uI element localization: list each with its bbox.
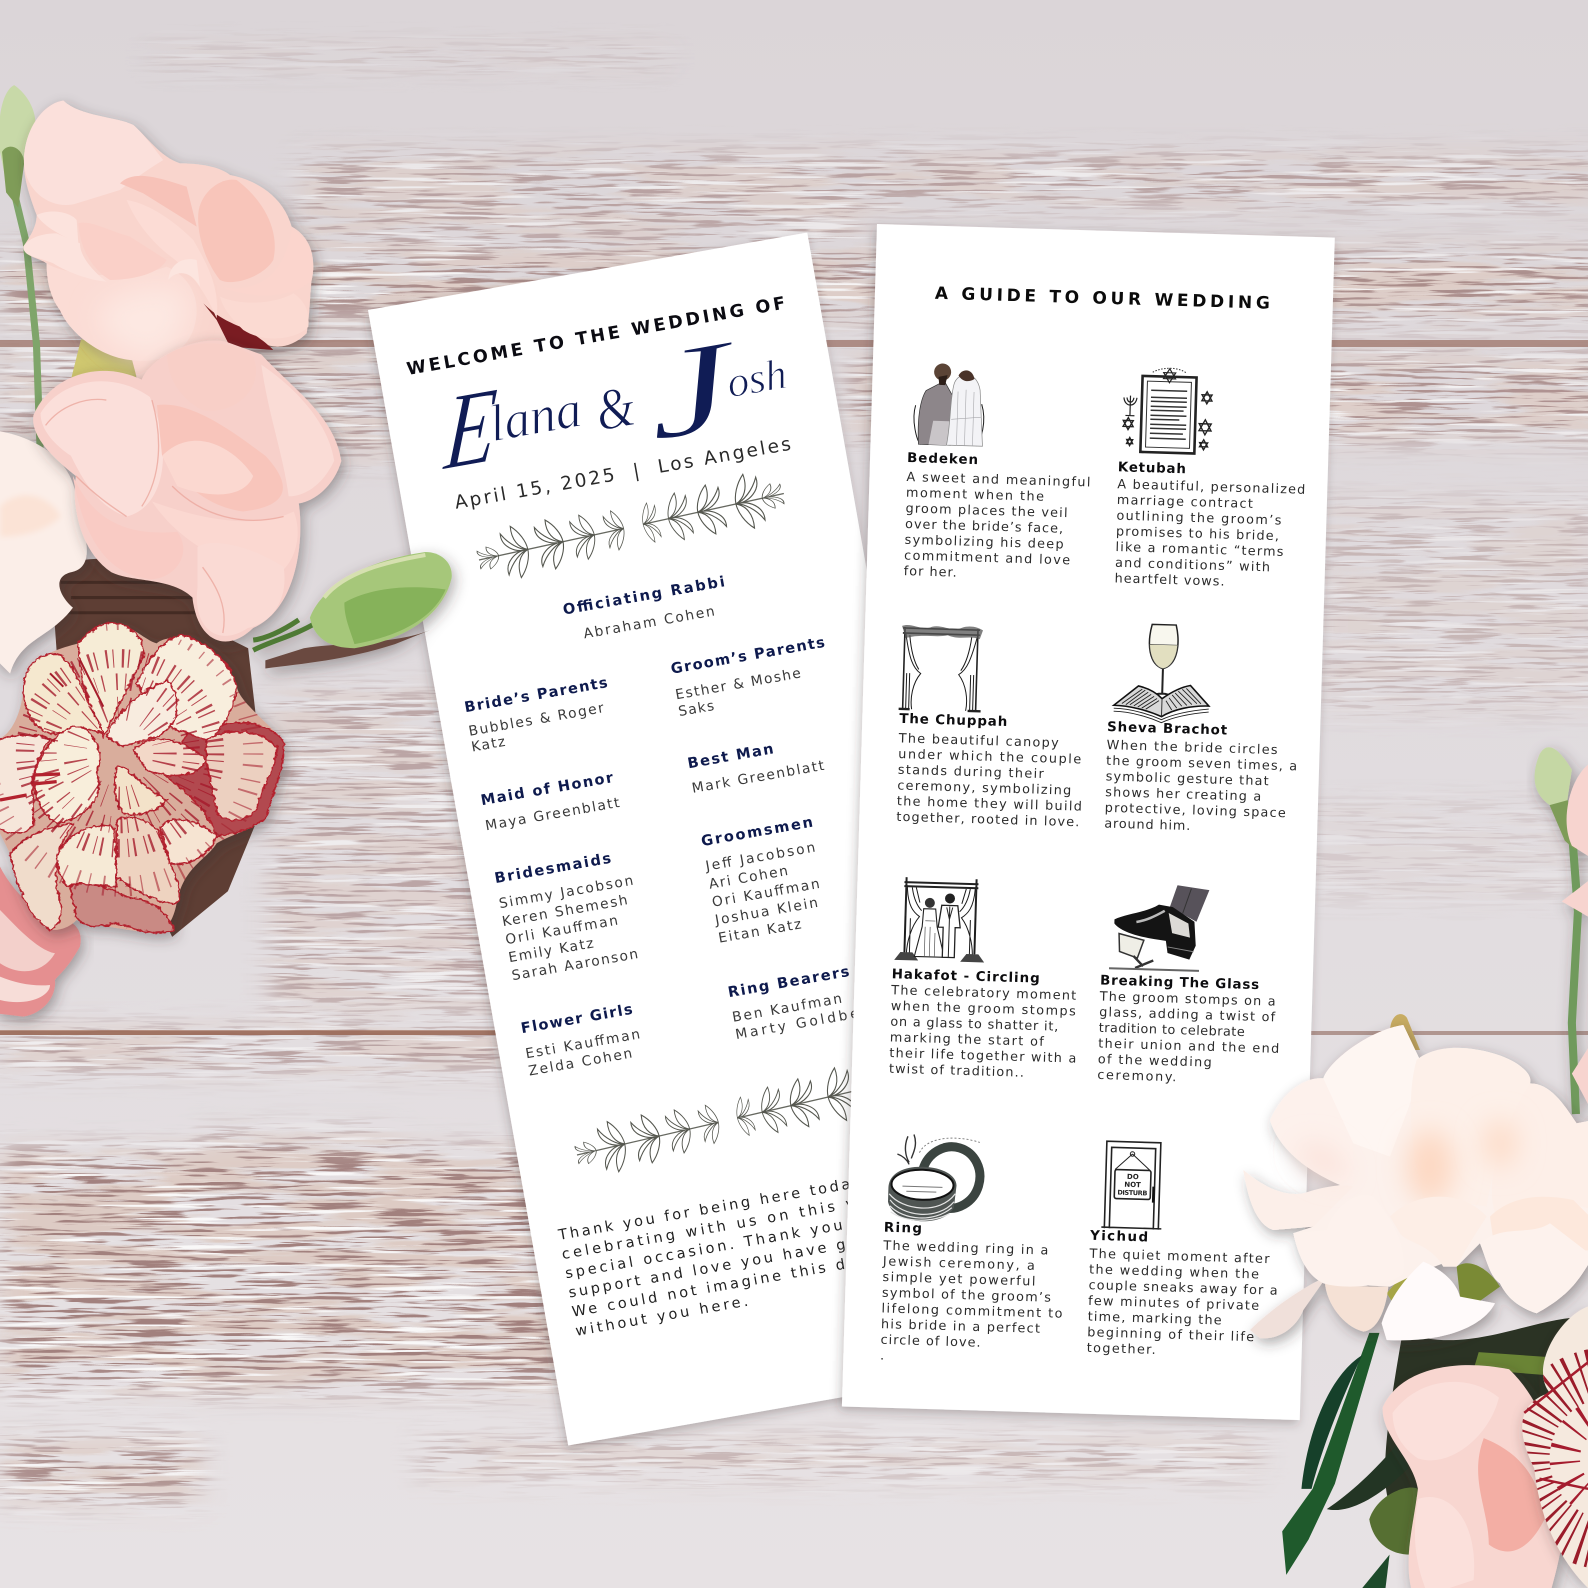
heading: The Chuppah xyxy=(899,712,1007,730)
maid of honor: Maid of Honor xyxy=(479,769,615,809)
thank-you message: Thank you for being here today and xyxy=(556,1167,905,1244)
icon: ketubah contract with stars xyxy=(1122,367,1213,454)
description: like a romantic “terms xyxy=(1115,540,1284,560)
groomsmen: Groomsmen xyxy=(700,814,814,850)
icon: tip of bud behind white carnation xyxy=(1390,1014,1420,1050)
title: couple names in script: E xyxy=(439,365,501,494)
item: Hakafot - Circling xyxy=(888,877,1082,1082)
icon: couple under chuppah xyxy=(894,877,987,963)
description: under which the couple xyxy=(898,747,1082,767)
divider: lower leaf sprig xyxy=(571,1060,881,1181)
title: couple names in script xyxy=(417,304,798,507)
description: their life together with a xyxy=(889,1046,1077,1067)
description: ceremony. xyxy=(1097,1068,1177,1085)
bridesmaids xyxy=(493,847,647,984)
divider: upper leaf sprig xyxy=(473,467,790,587)
description: The beautiful canopy xyxy=(898,731,1059,751)
item: Bedeken xyxy=(903,363,1094,585)
icon: big white carnation xyxy=(1243,1025,1588,1340)
bridesmaids: Sarah Aaronson xyxy=(511,946,639,984)
description: on a glass to shatter it, xyxy=(890,1015,1058,1035)
description: tradition to celebrate xyxy=(1099,1021,1245,1040)
description: symbolizing his deep xyxy=(904,533,1064,552)
icon: red-striped carnation corner xyxy=(1522,1307,1588,1588)
description: twist of tradition.. xyxy=(889,1062,1024,1081)
description xyxy=(1096,989,1281,1088)
heading: Sheva Brachot xyxy=(1107,720,1228,739)
ring bearers: Marty Goldberg xyxy=(734,1002,880,1043)
title: couple names in script: & xyxy=(590,373,640,443)
flower girls xyxy=(520,1000,644,1080)
description: A sweet and meaningful xyxy=(906,470,1091,490)
icon: groom veiling bride xyxy=(913,363,985,446)
icon: top-right bud and stem xyxy=(1535,747,1588,1114)
description: When the bride circles xyxy=(1106,738,1278,758)
groom's parents: Esther & Moshe xyxy=(674,666,802,703)
officiating rabbi: Officiating Rabbi xyxy=(562,573,726,619)
icon: door with do not disturb sign: NOT xyxy=(1124,1181,1141,1189)
flower girls: Zelda Cohen xyxy=(527,1046,633,1080)
groomsmen: Ori Kauffman xyxy=(711,876,821,911)
dark foliage and stems xyxy=(1282,1317,1588,1588)
thank-you message: special occasion. Thank you for your xyxy=(564,1202,931,1282)
thank-you message xyxy=(556,1164,941,1340)
thank-you message: celebrating with us on this very xyxy=(561,1190,889,1263)
maid of honor: Maya Greenblatt xyxy=(484,795,621,834)
flower girls: Esti Kauffman xyxy=(524,1026,641,1062)
heading: Hakafot - Circling xyxy=(892,967,1040,987)
description: glass, adding a twist of xyxy=(1099,1005,1276,1025)
description: couple sneaks away for a xyxy=(1088,1278,1278,1299)
groomsmen: Ari Cohen xyxy=(708,863,789,893)
item: Ketubah xyxy=(1114,367,1309,592)
heading: Ketubah xyxy=(1118,460,1186,477)
title: couple names in script: J xyxy=(633,312,753,468)
panel: welcome programme card xyxy=(368,233,1007,1445)
bride's parents: Bubbles & Roger xyxy=(467,700,605,740)
bride's parents: Katz xyxy=(470,734,506,756)
panel: guide to our wedding card xyxy=(842,224,1335,1420)
description: stands during their xyxy=(898,763,1045,782)
best man: Best Man xyxy=(686,740,775,772)
icon: pink carnation low left xyxy=(0,867,81,1017)
description xyxy=(1114,477,1306,592)
ring bearers xyxy=(727,959,880,1043)
description xyxy=(879,1239,1065,1369)
title: couple names in script: lana xyxy=(485,381,586,453)
bridesmaids: Bridesmaids xyxy=(493,850,612,887)
groomsmen: Eitan Katz xyxy=(717,916,803,947)
best man xyxy=(686,732,826,797)
heading: Ring xyxy=(884,1221,922,1237)
bride's parents xyxy=(463,674,616,756)
description xyxy=(1104,738,1298,837)
ring bearers: Ben Kaufman xyxy=(731,991,843,1026)
heading: Yichud xyxy=(1089,1229,1148,1245)
description: A beautiful, personalized xyxy=(1117,477,1306,498)
description: shows her creating a xyxy=(1105,785,1261,805)
description: together, rooted in love. xyxy=(896,810,1080,830)
description: marriage contract xyxy=(1117,493,1253,512)
dark wood shadow beneath flowers xyxy=(51,559,265,937)
ring bearers: Ring Bearers xyxy=(727,963,851,1001)
description: time, marking the xyxy=(1087,1310,1222,1329)
description: together. xyxy=(1087,1341,1156,1358)
bridesmaids: Emily Katz xyxy=(507,936,595,966)
bridesmaids: Orli Kauffman xyxy=(504,913,619,948)
description: beginning of their life xyxy=(1087,1325,1254,1345)
description: few minutes of private xyxy=(1088,1294,1259,1314)
description: . xyxy=(880,1348,884,1364)
icon: green closed bud xyxy=(253,552,452,668)
description: lifelong commitment to xyxy=(881,1301,1063,1322)
thank-you message: We could not imagine this day xyxy=(571,1253,869,1321)
description: the home they will build xyxy=(897,794,1082,815)
description: circle of love. xyxy=(880,1333,981,1351)
date and location: April 15, 2025 | Los Angeles xyxy=(453,434,793,514)
description: when the groom stomps xyxy=(891,999,1076,1019)
title: welcome heading: WELCOME TO THE WEDDING OF xyxy=(405,294,787,380)
description: commitment and love xyxy=(904,548,1070,568)
heading: Breaking The Glass xyxy=(1100,973,1259,993)
groom's parents xyxy=(670,634,834,720)
icon: white carnation xyxy=(0,430,87,674)
best man: Mark Greenblatt xyxy=(691,758,826,797)
title: guide heading: A GUIDE TO OUR WEDDING xyxy=(935,284,1270,314)
description: their union and the end xyxy=(1098,1037,1279,1057)
groom's parents: Groom’s Parents xyxy=(670,634,826,678)
description: the wedding when the xyxy=(1089,1262,1259,1282)
description: The quiet moment after xyxy=(1088,1247,1270,1267)
icon: door with do not disturb sign: DO xyxy=(1127,1173,1139,1181)
description: around him. xyxy=(1104,817,1190,834)
icon: top pink carnation xyxy=(23,101,313,390)
description xyxy=(888,983,1078,1082)
icon: shoe stomping glass xyxy=(1109,883,1210,971)
heading: Bedeken xyxy=(907,451,978,468)
bride's parents: Bride’s Parents xyxy=(463,674,609,716)
flowers: left bouquet xyxy=(0,85,452,1017)
groomsmen: Jeff Jacobson xyxy=(703,840,817,875)
icon: pink carnation bottom right xyxy=(1382,1365,1566,1588)
description: simple yet powerful xyxy=(882,1270,1036,1290)
description xyxy=(903,470,1091,585)
description: Jewish ceremony, a xyxy=(882,1254,1035,1274)
description: symbol of the groom’s xyxy=(882,1286,1051,1306)
item: Breaking The Glass xyxy=(1096,883,1284,1088)
title: couple names in script: osh xyxy=(723,351,790,407)
bridesmaids: Simmy Jacobson xyxy=(498,873,635,912)
icon: middle pink carnation xyxy=(33,341,341,642)
officiating rabbi xyxy=(562,573,731,645)
icon: stem and top-left bud xyxy=(0,85,137,461)
groomsmen xyxy=(699,814,831,947)
item: Yichud xyxy=(1086,1141,1282,1362)
item: Sheva Brachot xyxy=(1104,623,1301,837)
description: his bride in a perfect xyxy=(881,1317,1040,1337)
flowers: right bouquet xyxy=(1243,747,1588,1588)
description: symbolic gesture that xyxy=(1105,769,1269,789)
icon: door with do not disturb sign xyxy=(1101,1141,1164,1230)
thank-you message: support and love you have given us. xyxy=(567,1223,925,1301)
description: marking the start of xyxy=(890,1030,1045,1050)
groom's parents: Saks xyxy=(677,698,715,720)
description: of the wedding xyxy=(1098,1052,1212,1071)
description: The wedding ring in a xyxy=(882,1239,1049,1259)
description xyxy=(895,731,1084,830)
description: the groom seven times, a xyxy=(1106,754,1297,774)
description: and conditions” with xyxy=(1115,556,1270,575)
description: groom places the veil xyxy=(905,501,1068,521)
icon: wine glass on open book xyxy=(1113,623,1211,724)
thank-you message: without you here. xyxy=(574,1294,749,1340)
description: moment when the xyxy=(906,486,1044,505)
icon: red-striped carnation xyxy=(0,620,284,933)
description: for her. xyxy=(903,564,957,581)
description: protective, loving space xyxy=(1105,801,1286,821)
description xyxy=(1086,1247,1279,1362)
icon: chuppah canopy xyxy=(899,624,983,711)
icon: door with do not disturb sign: DISTURB xyxy=(1117,1189,1148,1197)
bridesmaids: Keren Shemesh xyxy=(501,892,629,930)
description: The celebratory moment xyxy=(890,983,1076,1004)
description: heartfelt vows. xyxy=(1114,571,1225,590)
groomsmen: Joshua Klein xyxy=(713,895,819,929)
icon: wedding rings xyxy=(887,1134,988,1223)
description: over the bride’s face, xyxy=(905,517,1063,537)
item: Ring xyxy=(879,1134,1068,1369)
description: The groom stomps on a xyxy=(1098,989,1276,1010)
maid of honor xyxy=(479,769,621,834)
item: The Chuppah xyxy=(895,624,1087,830)
officiating rabbi: Abraham Cohen xyxy=(582,604,716,642)
description: promises to his bride, xyxy=(1116,524,1279,544)
flower girls: Flower Girls xyxy=(520,1001,634,1037)
description: outlining the groom’s xyxy=(1116,509,1282,529)
description: ceremony, symbolizing xyxy=(897,778,1071,799)
